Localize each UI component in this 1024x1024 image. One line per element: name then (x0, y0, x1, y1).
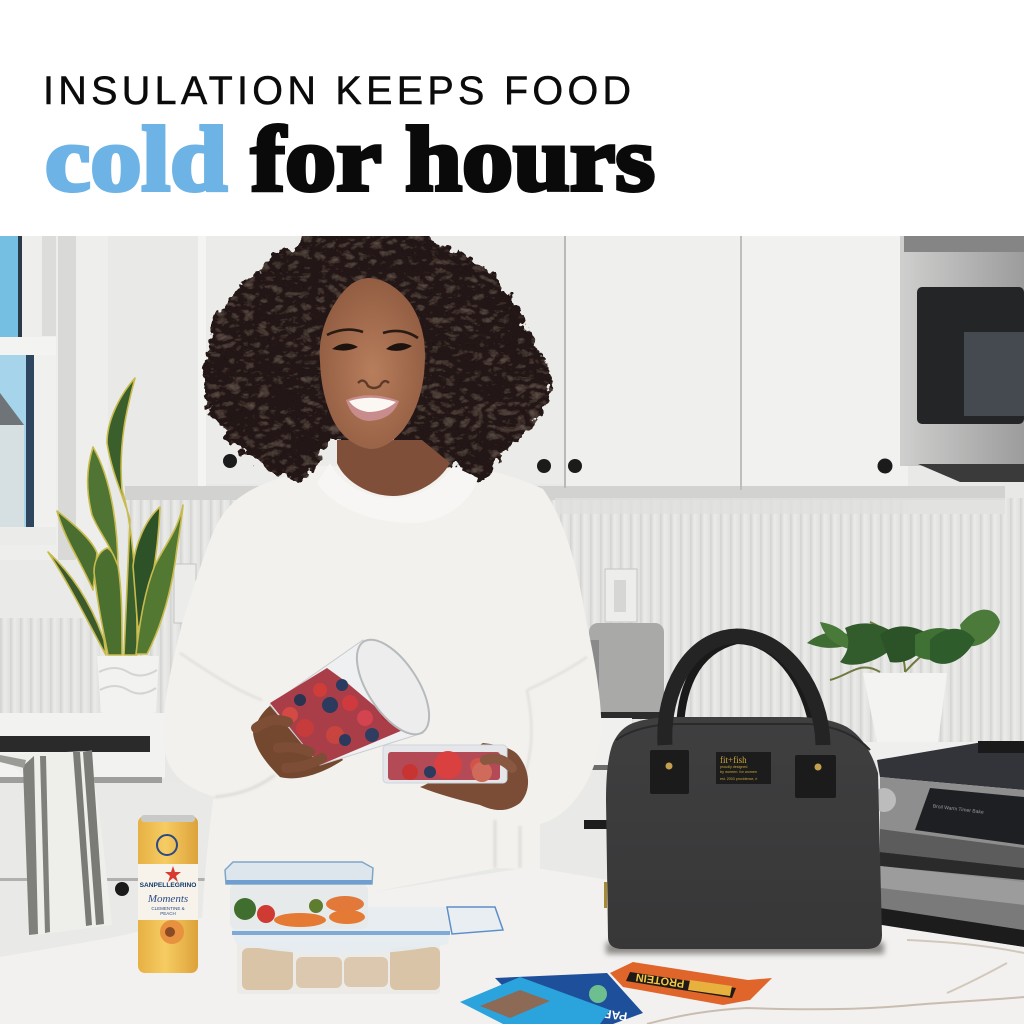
protein bar: PROTEIN (635, 971, 685, 989)
sparkling drink can: CLEMENTINE & (151, 906, 185, 911)
bag shadow (606, 942, 884, 954)
ribbed backsplash (125, 498, 1024, 748)
eyes and brows (327, 330, 418, 351)
white plant pot (97, 656, 159, 717)
wrap container (232, 907, 503, 994)
sink counter (0, 713, 212, 957)
sweater (163, 466, 601, 925)
collar (317, 463, 478, 523)
handle tabs (650, 750, 689, 794)
snack packs (460, 973, 643, 1024)
window (0, 236, 108, 713)
title (43, 69, 655, 210)
brand label: fit+fish (720, 755, 747, 765)
kitchen wall (0, 236, 1024, 1024)
sparkling drink can: Moments (147, 893, 188, 905)
sparkling drink can: SANPELLEGRINO (140, 882, 196, 889)
snake plant (48, 378, 183, 655)
tilted berry cup (270, 628, 443, 765)
black lunch bag (604, 636, 884, 954)
protein bar (610, 962, 772, 1005)
right thumb (485, 759, 512, 768)
hair (205, 228, 552, 482)
bag body (606, 717, 882, 949)
right plant (807, 610, 1000, 680)
zipper pull (604, 882, 607, 908)
toaster (589, 623, 664, 719)
microwave (900, 236, 1024, 482)
brand label (716, 752, 771, 784)
neck (337, 440, 450, 496)
outlets (174, 564, 637, 623)
brand label: proudly designed (720, 765, 747, 769)
photo: kitchen scene (0, 228, 1024, 1024)
snack packs: PAR (602, 1006, 628, 1024)
berry container (383, 745, 507, 783)
sparkling drink can (138, 815, 198, 973)
stove: Broil Warm Timer Bake (932, 804, 984, 816)
veggie container (225, 862, 373, 929)
heading line: insulation: INSULATION KEEPS FOOD (43, 69, 631, 113)
brand label: est. 2003 providence, ri (720, 777, 758, 781)
left fingers (256, 720, 322, 768)
right pot (863, 673, 947, 746)
nose (358, 381, 389, 388)
sweater folds (180, 653, 587, 868)
upper cabinets (108, 236, 1005, 514)
marble countertop (0, 867, 1024, 1024)
sparkling drink can: PEACH (160, 911, 176, 916)
handle (665, 636, 823, 745)
heading word: cold: cold (45, 108, 227, 210)
woman (163, 228, 601, 925)
face (320, 278, 425, 449)
smile (346, 395, 399, 421)
striped towel (0, 750, 112, 936)
stove (860, 741, 1024, 947)
brand label: by women. for women (720, 770, 757, 774)
right hand (420, 743, 528, 810)
counter behind right of woman (530, 718, 632, 880)
heading words: for hours: for hours (251, 108, 655, 210)
left hand behind cup (253, 698, 343, 778)
far handle (680, 640, 815, 745)
